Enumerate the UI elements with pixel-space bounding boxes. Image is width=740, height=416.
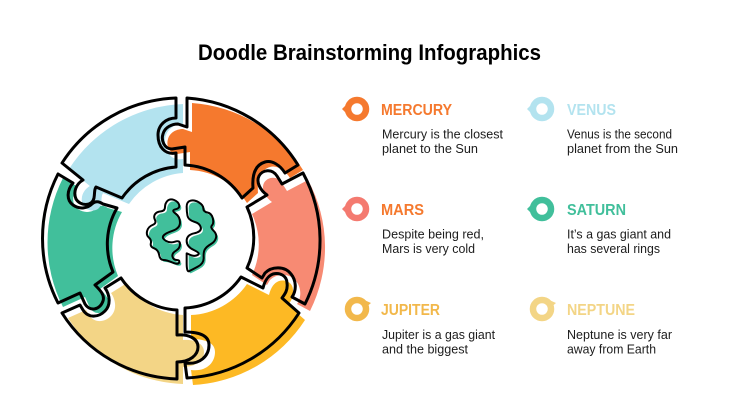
text: Jupiter description: and the biggest — [382, 342, 469, 356]
heading: Jupiter: JUPITER — [381, 302, 440, 319]
puzzle piece: orange — [167, 103, 303, 203]
text: Venus description: Venus is the second — [567, 128, 672, 142]
item: Venus — [527, 100, 678, 156]
icon: Venus ring — [527, 100, 551, 118]
text: Mercury description: planet to the Sun — [382, 142, 478, 156]
item: Mars — [342, 200, 484, 256]
puzzle ring diagram — [43, 98, 325, 385]
item: Saturn — [527, 200, 671, 256]
text: Saturn description: It’s a gas giant and — [567, 228, 671, 242]
heading: Venus: VENUS — [567, 102, 616, 119]
text: Mars description: Despite being red, — [382, 228, 484, 242]
icon: Neptune ring — [533, 299, 556, 318]
puzzle piece: yellow — [191, 280, 305, 385]
puzzle outlines — [43, 98, 320, 379]
text: Mercury description: Mercury is the closest — [382, 128, 504, 142]
icon: Mars ring — [342, 200, 366, 218]
heading: Saturn: SATURN — [567, 202, 626, 219]
text: Saturn description: has several rings — [567, 242, 660, 256]
puzzle piece: salmon — [252, 178, 325, 311]
icon: Saturn ring — [527, 200, 551, 218]
item: Mercury — [342, 100, 504, 156]
heading: Neptune: NEPTUNE — [567, 302, 635, 319]
item: Neptune — [533, 299, 672, 356]
icon: Mercury ring — [342, 100, 366, 118]
text: Neptune description: away from Earth — [567, 342, 656, 356]
text: Venus description: planet from the Sun — [567, 142, 678, 156]
puzzle piece: green — [48, 178, 122, 313]
icon: brain — [147, 199, 218, 273]
item: Jupiter — [348, 299, 496, 356]
icon: Jupiter ring — [348, 299, 371, 318]
text: Jupiter description: Jupiter is a gas giant — [382, 328, 496, 342]
text: Neptune description: Neptune is very far — [567, 328, 672, 342]
puzzle piece: blue — [69, 104, 183, 210]
puzzle piece: sand — [68, 283, 204, 384]
blue knob over green — [82, 181, 112, 210]
title: Doodle Brainstorming Infographics — [198, 40, 541, 65]
text: Mars description: Mars is very cold — [382, 242, 475, 256]
heading: Mars: MARS — [381, 202, 424, 219]
heading: Mercury: MERCURY — [381, 102, 452, 119]
